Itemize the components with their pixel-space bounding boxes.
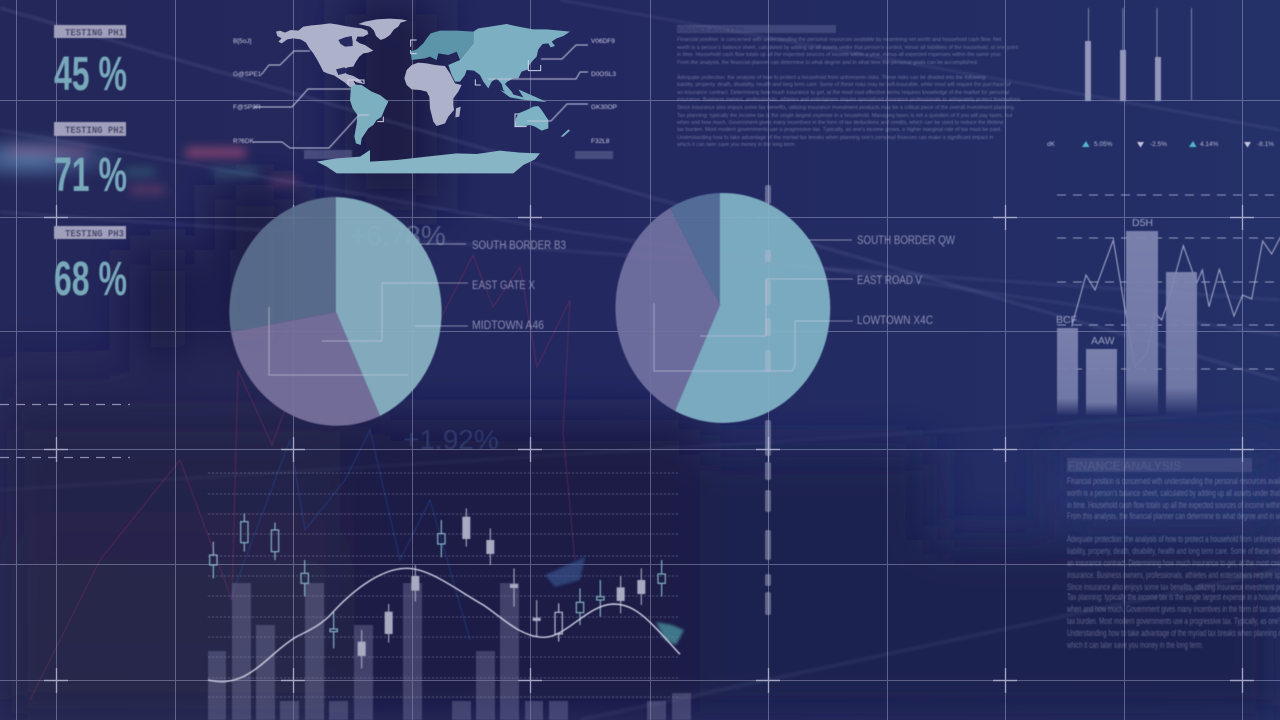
stat: up 5.05: 5.05%: [1094, 141, 1113, 148]
callout labels: F@SP3R: [233, 104, 261, 111]
europe: [411, 31, 473, 60]
hudson bay: [338, 36, 353, 47]
slice: lilac: [231, 312, 380, 426]
body text: Tax planning: typically the income tax is the single largest expense in a household. Managing taxes is not a question of if you will pay taxes, but: [677, 113, 1013, 119]
teal and blue smudges: [545, 557, 684, 645]
tag: testing ph1: TESTING PH1: [65, 28, 124, 40]
bar labels: D5H: [1132, 217, 1153, 229]
dashed gridlines: [1057, 195, 1280, 369]
connector lines: [415, 244, 468, 326]
faint background percentage figures: [350, 220, 499, 455]
slice: slate: [670, 193, 720, 305]
body text: liability, property, death, disability, health and long term care. Some of these risks may be self-insurable, while most will require the purchase of: [677, 82, 1011, 88]
slice: lilac: [615, 208, 720, 411]
world map: [276, 19, 570, 173]
tag: testing ph1: [54, 25, 126, 40]
label: south border qw: SOUTH BORDER QW: [857, 235, 955, 247]
callout labels: GK30OP: [591, 104, 617, 111]
heading bar: [1067, 458, 1252, 472]
region brackets: [348, 40, 541, 127]
value: 68 percent: 68 %: [54, 253, 127, 306]
candle bodies: [1085, 41, 1161, 101]
greenland: [358, 19, 407, 40]
tag: testing ph3: [54, 226, 126, 240]
slice: light blue: [336, 197, 442, 416]
label: south border b3: SOUTH BORDER B3: [472, 240, 566, 252]
stat: first value: dK: [1047, 141, 1056, 148]
candle wicks: [1088, 8, 1192, 100]
value: 45 percent: 45 %: [54, 48, 127, 101]
tag: testing ph2: [54, 122, 126, 137]
tag: testing ph2: TESTING PH2: [65, 125, 124, 137]
curve: [208, 568, 680, 682]
stat row: market changes: [1047, 141, 1274, 148]
callout labels: R?6DK: [233, 138, 255, 145]
body text: Since insurance also enjoys some tax benefits, utilizing insurance investment products may be a critical piece of the overall investment planning.: [677, 105, 1015, 111]
bars: [1057, 231, 1197, 416]
tag: testing ph3: TESTING PH3: [65, 228, 124, 240]
map callouts: [233, 38, 617, 159]
body text: From the analysis, the financial planner can determine to what degree and in what time the personal goals can be accomplished.: [677, 60, 978, 66]
bar labels: AAW: [1091, 335, 1115, 347]
heading: FINANCE ANALYSIS: [678, 27, 744, 34]
body text: Financial position: is concerned with understanding the personal resources available by examining net worth and household cash flow. Net: [677, 37, 1002, 43]
body text: an insurance contract. Determining how much insurance to get, at the most cost effective terms requires knowledge of the market for personal: [677, 90, 1009, 96]
body text: tax burden. Most modern governments use a progressive tax. Typically, as one's income grows, a higher marginal rate of tax must be paid.: [677, 127, 1001, 133]
body text: [677, 37, 1022, 148]
chart: top right candlesticks: [1085, 8, 1192, 101]
candlesticks: [210, 508, 665, 668]
body text: [1066, 476, 1280, 650]
label: east road v: EAST ROAD V: [857, 275, 922, 287]
callout labels: G@SPE1: [233, 71, 262, 78]
dashed gridlines: [208, 473, 680, 697]
new zealand: [561, 129, 570, 137]
grid cross markers: [44, 205, 1254, 693]
pie chart: left: [229, 197, 566, 426]
slice: slate: [229, 197, 336, 332]
stat: up 4.14: 4.14%: [1200, 141, 1219, 148]
callout lines: [253, 45, 588, 148]
stat: down 8.1: -8.1%: [1257, 141, 1274, 148]
body text: in time. Household cash flow totals up all the expected sources of income within a year, minus all expected expenses within the same year.: [677, 52, 1002, 58]
overlay lines: [269, 283, 468, 375]
body text: worth is a person's balance sheet, calculated by adding up all assets under that person's control, minus all liabilities of the household, at one point: [677, 45, 1019, 51]
line series: [1072, 237, 1280, 367]
map legend blocks: [304, 150, 613, 159]
body text: insurance. Business owners, professionals, athletes and entertainers require specialized insurance professionals to adequately protect themselves.: [677, 97, 1022, 103]
panel: testing percentages: [54, 25, 127, 306]
gulf of mexico: [336, 67, 348, 75]
pie chart: right: [615, 193, 955, 423]
stat: down 8.1: [1244, 141, 1274, 148]
bar labels: BCF: [1056, 314, 1077, 326]
stat: up 5.05: [1082, 141, 1113, 148]
callout labels: V06DF9: [591, 38, 615, 45]
callout labels: D0OSL3: [591, 71, 616, 78]
label: east gate x: EAST GATE X: [472, 280, 535, 292]
madagascar: [455, 107, 461, 117]
body text: which it can later save you money in the long term.: [677, 142, 796, 148]
stat: down 2.5: [1137, 141, 1167, 148]
bar labels: [1056, 217, 1153, 347]
australia: [515, 106, 548, 131]
africa: [404, 63, 462, 126]
antarctica: [317, 150, 540, 173]
central vertical dashed bar: [765, 185, 771, 615]
overlay lines: [654, 279, 853, 371]
callout labels: F32L8: [591, 138, 610, 145]
background red and blue trend lines: [30, 255, 575, 700]
panel: finance analysis top: [677, 25, 1022, 148]
heading: FINANCE ANALYSIS: [1068, 459, 1181, 473]
north america: [276, 23, 373, 87]
body text: when and how much. Government gives many incentives in the form of tax deductions and credits, which can be used to reduce the lifetime: [677, 120, 1004, 126]
heading bar: [677, 25, 836, 33]
callout labels: [233, 38, 617, 145]
bars: [208, 583, 691, 720]
stat: down 2.5: -2.5%: [1150, 141, 1167, 148]
indonesia: [500, 89, 547, 102]
faint background percentage figures: +1.92%: [403, 424, 499, 455]
label: midtown a46: MIDTOWN A46: [472, 320, 544, 332]
callout labels: B[5oJ]: [233, 38, 252, 45]
faint background percentage figures: +6.78%: [350, 220, 446, 251]
south america: [350, 85, 388, 145]
stat: up 4.14: [1189, 141, 1219, 148]
body text: Adequate protection: the analysis of how to protect a household from unforeseen risks. These risks can be divided into the following:: [677, 75, 987, 81]
panel: finance analysis right: [1066, 458, 1280, 650]
value: 71 percent: 71 %: [54, 149, 127, 202]
slice: light blue: [675, 193, 830, 423]
chart: bottom candlesticks and curve: [208, 473, 691, 720]
body text: Understanding how to take advantage of the myriad tax breaks when planning one's personal finances can make a significant impact in: [677, 135, 993, 141]
chart: right bars and line: [1056, 195, 1280, 416]
asia: [448, 24, 570, 97]
connector line: [808, 239, 852, 241]
left dashed guide lines: [0, 404, 130, 458]
body text: which it can later save you money in the long term.: [1066, 640, 1203, 650]
label: lowtown x4c: LOWTOWN X4C: [857, 315, 933, 327]
